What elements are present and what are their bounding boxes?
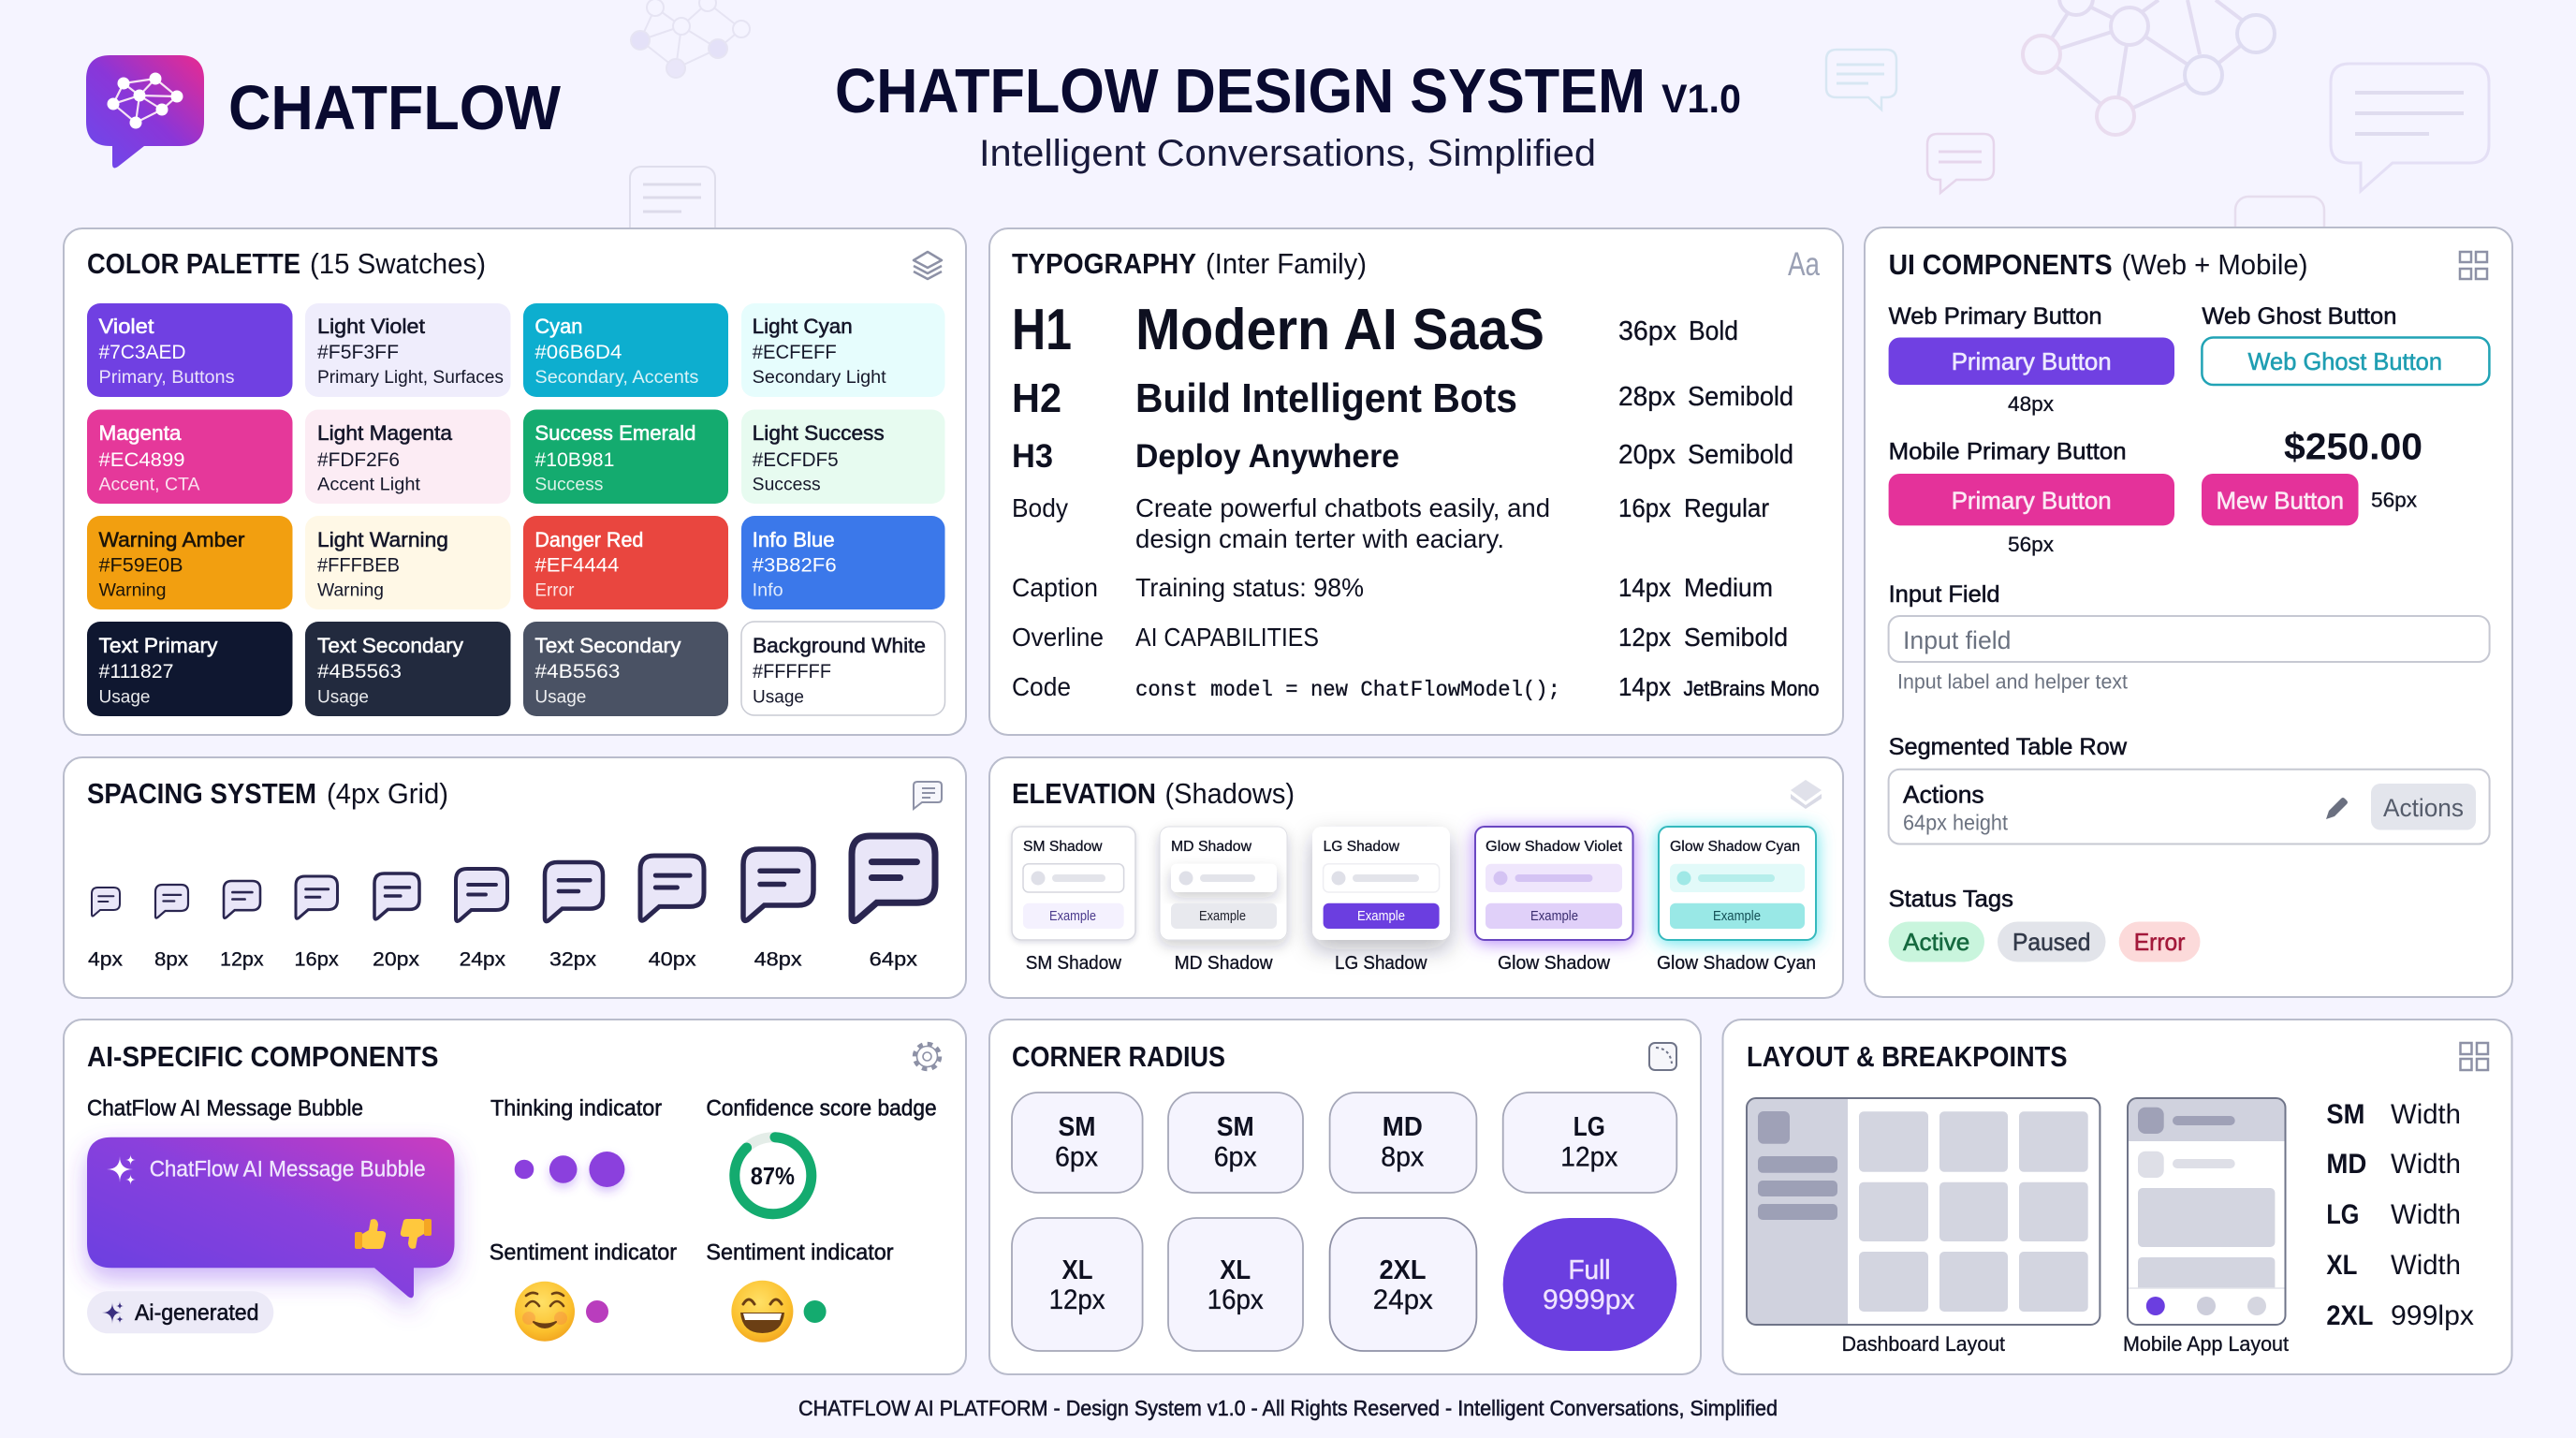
swatch: success emerald: Success	[534, 476, 603, 494]
panel: color palette	[64, 228, 966, 735]
input helper text: Input label and helper text	[1897, 670, 2128, 693]
panel: typography	[989, 228, 1843, 735]
input field: Input field	[1903, 626, 2011, 654]
panel: elevation	[989, 757, 1843, 998]
heading: elevation	[1012, 777, 1295, 810]
button: web primary: Primary Button	[1952, 347, 2112, 375]
radius tile: xl 16px	[1168, 1218, 1303, 1351]
spacing token: 40px: 40px	[649, 949, 696, 971]
thinking indicator dots	[515, 1152, 624, 1187]
spacing token: 40px	[640, 856, 704, 971]
indicator dot: magenta	[586, 1300, 608, 1323]
segmented table row	[1889, 770, 2490, 844]
caption: glow shadow: Glow Shadow	[1498, 953, 1611, 974]
label: segmented table row: Segmented Table Row	[1889, 734, 2128, 760]
decorative chat bubble pink	[1927, 134, 1994, 193]
breakpoint table: MD	[2326, 1149, 2366, 1180]
breakpoint table: 2XL	[2326, 1300, 2373, 1331]
label: web primary button: Web Primary Button	[1889, 303, 2102, 330]
swatch: light violet: Primary Light, Surfaces	[317, 368, 504, 388]
mobile app layout wireframe	[2128, 1098, 2286, 1325]
swatch: text primary	[87, 622, 292, 716]
radius tile: sm 6px a	[1012, 1093, 1143, 1193]
caption: lg shadow: LG Shadow	[1335, 953, 1427, 974]
button: mew button: Mew Button	[2217, 487, 2344, 515]
type row: overline: 12px	[1618, 623, 1671, 652]
swatch: light success: #ECFDF5	[753, 449, 839, 471]
swatch: info blue: #3B82F6	[753, 554, 837, 577]
type row: H2: Semibold	[1688, 382, 1793, 412]
elevation card: glow shadow cyan: Glow Shadow Cyan	[1670, 839, 1800, 855]
heading: ui components: (Web + Mobile)	[2121, 248, 2308, 281]
breakpoint table: SM	[2326, 1099, 2364, 1130]
icon: gear	[915, 1044, 940, 1069]
swatch: background white: Background White	[753, 634, 926, 657]
label: confidence score badge: Confidence score badge	[706, 1096, 937, 1122]
button: actions: Actions	[2383, 794, 2464, 822]
radius tile: lg 12px: 12px	[1560, 1142, 1617, 1173]
decorative network right	[2023, 0, 2275, 135]
heading: spacing system: (4px Grid)	[327, 777, 448, 810]
type row: H1: H1	[1012, 298, 1072, 362]
input field	[1889, 616, 2490, 662]
swatch: violet	[87, 303, 292, 397]
label: sentiment indicator 2: Sentiment indicator	[706, 1240, 894, 1266]
price: $250.00	[2284, 427, 2422, 468]
button: mobile primary: Primary Button	[1952, 487, 2112, 515]
elevation card: sm shadow	[1012, 827, 1135, 940]
radius tile: md 8px	[1330, 1093, 1476, 1193]
caption: md shadow: MD Shadow	[1175, 953, 1273, 974]
heading: elevation: (Shadows)	[1164, 777, 1295, 810]
tag: error: Error	[2134, 928, 2186, 956]
icon: chat bubble	[914, 782, 942, 809]
swatch: cyan: Secondary, Accents	[534, 368, 698, 388]
icon: grid	[2460, 1043, 2488, 1070]
heading: typography	[1012, 247, 1367, 280]
type row: overline: Semibold	[1684, 623, 1788, 652]
swatch: danger red: Error	[534, 580, 575, 601]
heading: color palette	[87, 247, 486, 280]
breakpoint table: Width	[2391, 1149, 2461, 1180]
type row: H2: 28px	[1618, 382, 1676, 412]
swatch: info blue	[741, 516, 945, 609]
heading: ui components	[1889, 248, 2308, 281]
elevation card: glow shadow cyan: Example	[1713, 909, 1761, 924]
swatch: magenta: Accent, CTA	[99, 476, 200, 494]
type row: H2: H2	[1012, 375, 1061, 421]
swatch: light warning: Warning	[317, 580, 384, 601]
swatch: light magenta: Light Magenta	[317, 421, 453, 445]
radius tile: md 8px: MD	[1383, 1112, 1423, 1142]
elevation card: md shadow: Example	[1199, 909, 1246, 924]
caption: 56px right: 56px	[2371, 489, 2417, 511]
swatch: background white	[741, 622, 945, 715]
type row: overline	[1012, 623, 1788, 652]
radius tile: sm 6px a: 6px	[1055, 1142, 1098, 1173]
elevation card: sm shadow: SM Shadow	[1023, 839, 1103, 855]
radius tile: full 9999px: Full	[1569, 1255, 1610, 1285]
elevation card: lg shadow: LG Shadow	[1324, 839, 1399, 855]
type row: body: design cmain terter with eaciary.	[1135, 524, 1504, 553]
swatch: cyan	[523, 303, 728, 397]
type row: caption: Training status: 98%	[1135, 573, 1364, 602]
heading: typography: TYPOGRAPHY	[1012, 247, 1196, 280]
breakpoint table	[2326, 1099, 2474, 1331]
icon: stacked layers	[1791, 780, 1822, 809]
dashboard layout wireframe	[1747, 1098, 2100, 1325]
panel: layout and breakpoints	[1722, 1020, 2512, 1374]
label: mobile primary button: Mobile Primary Button	[1889, 439, 2127, 465]
type row: caption: Medium	[1684, 573, 1773, 602]
panel: spacing system	[64, 757, 966, 998]
swatch: warning amber: #F59E0B	[99, 554, 183, 577]
decorative network left	[631, 0, 750, 78]
swatch: magenta: #EC4899	[99, 449, 185, 471]
caption: mobile app layout: Mobile App Layout	[2123, 1332, 2289, 1356]
spacing token: 32px: 32px	[549, 949, 597, 971]
spacing token: 48px: 48px	[754, 949, 802, 971]
icon: layers	[914, 252, 942, 279]
type row: body	[1012, 493, 1769, 553]
ai message bubble	[87, 1137, 455, 1298]
tag: paused: Paused	[2012, 928, 2090, 956]
breakpoint table: Width	[2391, 1199, 2461, 1230]
spacing token: 20px: 20px	[373, 949, 420, 971]
heading: ui components: UI COMPONENTS	[1889, 248, 2113, 281]
label: message bubble: ChatFlow AI Message Bubble	[87, 1096, 363, 1122]
breakpoint table: XL	[2326, 1250, 2357, 1281]
swatch: text primary: Usage	[99, 687, 150, 708]
spacing token: 16px: 16px	[294, 949, 339, 971]
spacing token: 64px	[852, 836, 935, 971]
type row: overline: AI CAPABILITIES	[1135, 623, 1319, 652]
type row: H3	[1012, 438, 1793, 475]
title: CHATFLOW DESIGN SYSTEM	[835, 56, 1646, 126]
radius tile: sm 6px b	[1168, 1093, 1303, 1193]
label: thinking indicator: Thinking indicator	[490, 1096, 662, 1122]
icon: thumbs up	[355, 1219, 386, 1249]
radius tile: xl 12px: XL	[1061, 1255, 1093, 1285]
heading: corner radius: CORNER RADIUS	[1012, 1040, 1225, 1073]
swatch: magenta	[87, 410, 292, 504]
radius tile: full 9999px	[1503, 1218, 1676, 1351]
indicator dot: green	[804, 1300, 827, 1323]
radius tile: 2xl 24px	[1330, 1218, 1476, 1351]
type row: H3: H3	[1012, 438, 1053, 475]
type row: code: const model = new ChatFlowModel();	[1135, 678, 1560, 702]
label: web ghost button: Web Ghost Button	[2202, 303, 2396, 330]
icon: corner	[1649, 1043, 1676, 1070]
spacing token: 20px	[373, 873, 420, 971]
swatch: text secondary dark	[305, 622, 511, 716]
type row: code: JetBrains Mono	[1683, 677, 1820, 700]
swatch: text secondary dark: #4B5563	[317, 661, 402, 682]
elevation card: lg shadow	[1312, 827, 1450, 940]
panel: ai-specific components	[64, 1020, 966, 1374]
decorative chat bubble bottom right	[2235, 197, 2324, 253]
subtitle: Intelligent Conversations, Simplified	[979, 133, 1596, 174]
heading: typography: (Inter Family)	[1206, 247, 1367, 280]
heading: color palette: COLOR PALETTE	[87, 247, 300, 280]
breakpoint table: Width	[2391, 1099, 2461, 1130]
button: web primary	[1889, 337, 2174, 385]
breakpoint table: LG	[2326, 1199, 2359, 1230]
heading: color palette: (15 Swatches)	[310, 247, 486, 280]
brand name: CHATFLOW	[228, 73, 562, 143]
swatch: info blue: Info Blue	[753, 528, 835, 551]
icon: Aa: Aa	[1788, 246, 1820, 283]
swatch: cyan: Cyan	[534, 315, 582, 338]
type row: body: 16px	[1618, 493, 1671, 522]
spacing token: 12px	[220, 881, 264, 971]
radius tile: 2xl 24px: 24px	[1373, 1284, 1433, 1315]
emoji: grinning face	[731, 1281, 793, 1343]
type row: H1: Bold	[1689, 316, 1738, 346]
type row: code: 14px	[1618, 672, 1671, 701]
icon: pencil	[2326, 798, 2348, 819]
elevation card: glow shadow violet: Glow Shadow Violet	[1486, 839, 1623, 855]
swatch: text secondary dark: Text Secondary	[317, 634, 463, 657]
swatch: success emerald	[523, 410, 728, 504]
swatch: light success: Success	[753, 476, 821, 494]
swatch: warning amber: Warning	[99, 580, 167, 601]
radius tile: xl 12px	[1012, 1218, 1143, 1351]
spacing token: 48px	[743, 849, 813, 971]
spacing token: 64px: 64px	[870, 949, 918, 971]
icon: sparkles	[107, 1154, 136, 1185]
caption: sm shadow: SM Shadow	[1026, 953, 1122, 974]
swatch: light magenta: #FDF2F6	[317, 449, 400, 471]
swatch: background white: #FFFFFF	[753, 661, 831, 682]
icon: small sparkles	[102, 1301, 124, 1324]
swatch: violet: #7C3AED	[99, 342, 185, 363]
segmented table row: Actions	[1903, 781, 1984, 809]
swatch: light warning	[305, 516, 511, 609]
button: web ghost	[2202, 337, 2489, 385]
elevation card: md shadow: MD Shadow	[1171, 839, 1251, 855]
radius tile: full 9999px: 9999px	[1543, 1284, 1634, 1315]
type row: caption: 14px	[1618, 573, 1671, 602]
swatch: light cyan	[741, 303, 945, 397]
type row: H1	[1012, 298, 1738, 362]
spacing token: 8px	[154, 885, 189, 971]
elevation card: lg shadow: Example	[1357, 909, 1405, 924]
button: actions	[2371, 784, 2476, 829]
spacing token: 16px	[294, 876, 339, 971]
tag: error	[2119, 921, 2200, 962]
icon: thumbs down	[401, 1219, 432, 1249]
spacing token: 12px: 12px	[220, 949, 264, 971]
type row: H3: 20px	[1618, 440, 1676, 470]
swatch: light cyan: Light Cyan	[753, 315, 853, 338]
type row: code: Code	[1012, 672, 1071, 701]
type row: body: Body	[1012, 493, 1068, 522]
type row: H2: Build Intelligent Bots	[1135, 375, 1517, 421]
panel: ui components	[1865, 227, 2512, 997]
swatch: light magenta: Accent Light	[317, 476, 421, 494]
radius tile: xl 12px: 12px	[1049, 1284, 1105, 1315]
radius tile: sm 6px a: SM	[1058, 1112, 1095, 1142]
breakpoint table: Width	[2391, 1250, 2461, 1281]
elevation card: glow shadow cyan	[1659, 827, 1816, 940]
swatch: light cyan: #ECFEFF	[753, 342, 837, 363]
swatch: danger red: #EF4444	[534, 554, 620, 577]
elevation card: glow shadow violet	[1475, 827, 1632, 940]
emoji: smiling face	[515, 1282, 575, 1342]
confidence ring	[733, 1136, 813, 1216]
elevation card: glow shadow violet: Example	[1530, 909, 1578, 924]
spacing token: 8px: 8px	[154, 949, 189, 971]
confidence ring: 87%	[751, 1162, 795, 1190]
decorative chat bubble large	[2331, 64, 2489, 191]
swatch: light success	[741, 410, 945, 504]
swatch: light warning: #FFFBEB	[317, 554, 400, 577]
spacing token: 4px	[88, 888, 124, 971]
radius tile: xl 16px: XL	[1220, 1255, 1251, 1285]
heading: elevation: ELEVATION	[1012, 777, 1156, 810]
caption: 48px: 48px	[2008, 392, 2054, 416]
elevation card: md shadow	[1160, 827, 1287, 940]
tag: active	[1889, 921, 1984, 962]
title: V1.0	[1661, 77, 1741, 122]
swatch: success emerald: #10B981	[534, 449, 614, 471]
swatch: text secondary: Text Secondary	[534, 634, 681, 657]
swatch: text primary: Text Primary	[99, 634, 217, 657]
swatch: danger red: Danger Red	[534, 528, 643, 551]
swatch: warning amber: Warning Amber	[99, 528, 245, 551]
radius tile: lg 12px	[1503, 1093, 1676, 1193]
swatch: cyan: #06B6D4	[534, 342, 622, 363]
swatch: text secondary: Usage	[534, 687, 586, 708]
type row: H1: Modern AI SaaS	[1135, 298, 1544, 362]
heading: ai-specific components: AI-SPECIFIC COMPONENTS	[87, 1040, 438, 1073]
spacing token: 32px	[545, 862, 603, 971]
caption: glow shadow cyan: Glow Shadow Cyan	[1657, 953, 1816, 974]
swatch: light cyan: Secondary Light	[753, 368, 886, 388]
swatch: light warning: Light Warning	[317, 528, 448, 551]
swatch: violet: Violet	[99, 315, 154, 338]
radius tile: sm 6px b: SM	[1217, 1112, 1254, 1142]
swatch: background white: Usage	[753, 687, 804, 708]
radius tile: sm 6px b: 6px	[1214, 1142, 1257, 1173]
ai message bubble: ChatFlow AI Message Bubble	[150, 1157, 426, 1182]
swatch: magenta: Magenta	[99, 421, 182, 445]
swatch: text secondary: #4B5563	[534, 661, 620, 682]
swatch: violet: Primary, Buttons	[99, 368, 234, 388]
button: mobile primary	[1889, 474, 2174, 525]
segmented table row: 64px height	[1903, 811, 2009, 835]
swatch: light violet: #F5F3FF	[317, 342, 399, 363]
panel: corner radius	[989, 1020, 1701, 1374]
button: web ghost: Web Ghost Button	[2248, 347, 2442, 375]
breakpoint table: 999lpx	[2391, 1300, 2474, 1331]
type row: H1: 36px	[1618, 316, 1676, 346]
type row: code	[1012, 672, 1820, 702]
swatch: light violet: Light Violet	[317, 315, 425, 338]
ai-generated pill	[87, 1291, 273, 1333]
type row: body: Regular	[1684, 493, 1769, 522]
type row: caption: Caption	[1012, 573, 1098, 602]
logo bubble	[86, 55, 204, 168]
swatch: success emerald: Success Emerald	[534, 421, 695, 445]
tag: active: Active	[1903, 928, 1969, 956]
spacing token: 24px: 24px	[460, 949, 506, 971]
label: status tags: Status Tags	[1889, 886, 2013, 912]
heading: layout and breakpoints: LAYOUT & BREAKPOINTS	[1747, 1040, 2067, 1073]
swatch: warning amber	[87, 516, 292, 609]
type row: body: Create powerful chatbots easily, and	[1135, 493, 1550, 522]
swatch: text secondary dark: Usage	[317, 687, 369, 708]
swatch: light magenta	[305, 410, 511, 504]
type row: H3: Semibold	[1688, 440, 1793, 470]
swatch: info blue: Info	[753, 580, 783, 601]
type row: overline: Overline	[1012, 623, 1104, 652]
label: sentiment indicator 1: Sentiment indicator	[490, 1240, 677, 1266]
elevation card: sm shadow: Example	[1049, 909, 1096, 924]
radius tile: md 8px: 8px	[1381, 1142, 1424, 1173]
spacing token: 24px	[456, 869, 507, 971]
tag: paused	[1998, 921, 2106, 962]
caption: 56px under: 56px	[2008, 533, 2054, 556]
logo network icon	[107, 73, 183, 129]
type row: H3: Deploy Anywhere	[1135, 438, 1399, 475]
footer: CHATFLOW AI PLATFORM - Design System v1.0 - All Rights Reserved - Intelligent Conversations, Simplified	[798, 1396, 1778, 1420]
radius tile: xl 16px: 16px	[1208, 1284, 1264, 1315]
logo	[86, 55, 204, 168]
decorative chat bubble left	[630, 167, 715, 251]
button: mew button	[2202, 474, 2359, 525]
caption: dashboard layout: Dashboard Layout	[1842, 1332, 2005, 1356]
spacing token: 4px: 4px	[88, 949, 124, 971]
icon: grid	[2460, 252, 2487, 279]
label: input field: Input Field	[1889, 581, 2000, 608]
swatch: light violet	[305, 303, 511, 397]
type row: H2	[1012, 375, 1793, 421]
decorative chat bubble cyan	[1826, 50, 1896, 110]
radius tile: lg 12px: LG	[1573, 1112, 1605, 1142]
swatch: text secondary	[523, 622, 728, 716]
radius tile: 2xl 24px: 2XL	[1380, 1255, 1427, 1285]
swatch: danger red	[523, 516, 728, 609]
swatch: text primary: #111827	[99, 661, 174, 682]
type row: caption	[1012, 573, 1773, 602]
ai-generated pill: Ai-generated	[135, 1300, 258, 1326]
swatch: light success: Light Success	[753, 421, 885, 445]
heading: spacing system: SPACING SYSTEM	[87, 777, 316, 810]
